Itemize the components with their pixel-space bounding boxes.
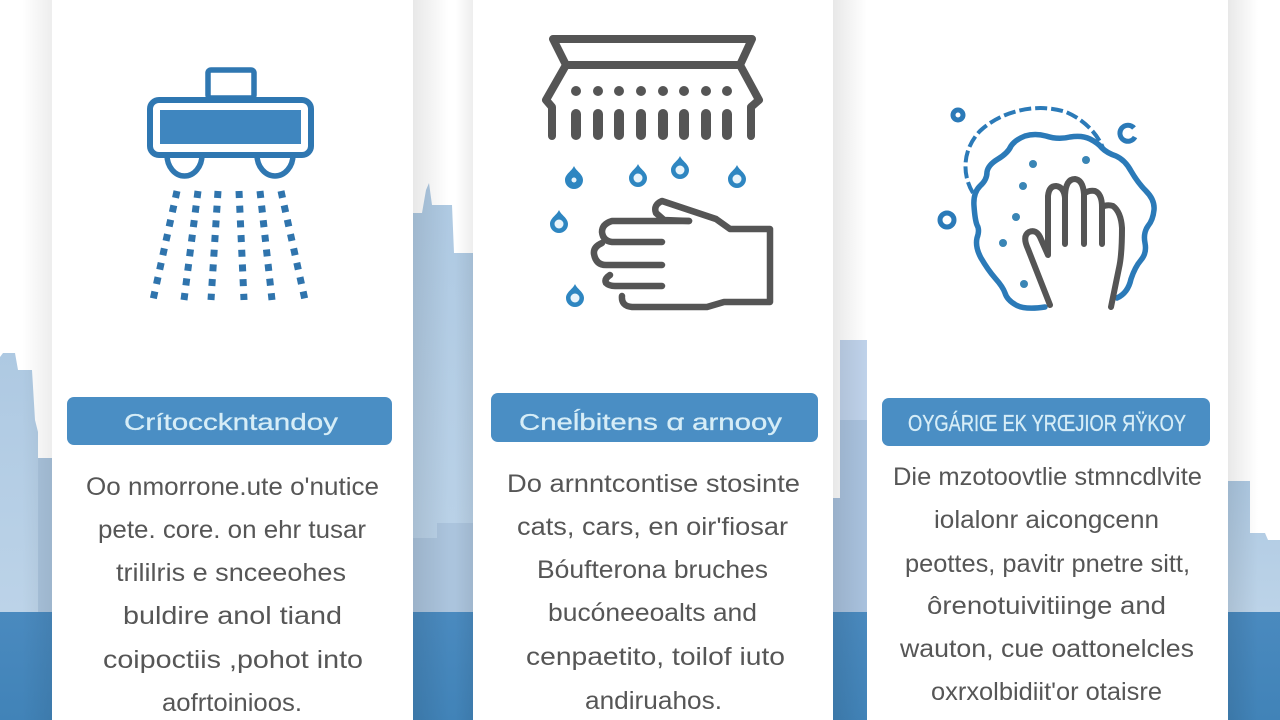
panel: left card xyxy=(52,0,413,720)
text block: left card: aofrtoinioos. xyxy=(162,689,302,717)
heading: middle card: Cneĺbitens ꭤ arnooy xyxy=(519,408,783,435)
text block: right card: oxrxolbidiit'or otaisre xyxy=(931,678,1162,706)
text block: left card: buldire anol tiand xyxy=(123,602,342,630)
heading: middle card xyxy=(491,393,818,442)
text block: right card: ôrenotuivitiinge and xyxy=(927,592,1166,620)
text block: right card: wauton, cue oattonelcles xyxy=(899,635,1194,663)
text block: left card: Oo nmorrone.ute o'nutice xyxy=(86,473,379,501)
text block: right card: Die mzotoovtlie stmncdlvite xyxy=(893,463,1202,491)
heading: left card: Crítocckntandoy xyxy=(124,409,339,435)
icon: water drops xyxy=(550,156,746,307)
text block: middle card xyxy=(507,470,800,715)
text block: middle card: andiruahos. xyxy=(585,687,722,715)
text block: right card: peottes, pavitr pnetre sitt, xyxy=(905,550,1190,578)
text block: middle card: Do arnntcontise stosinte xyxy=(507,470,800,498)
text block: middle card: bucóneeoalts and xyxy=(548,599,757,627)
text block: middle card: Bóufterona bruches xyxy=(537,556,768,584)
heading: right card xyxy=(882,398,1210,446)
icon: faucet head xyxy=(546,39,759,136)
text block: left card: trililris e snceeohes xyxy=(116,559,346,587)
icon: soapy hand xyxy=(940,108,1154,308)
text block: right card xyxy=(893,463,1202,706)
text block: right card: iolalonr aicongcenn xyxy=(934,506,1159,534)
text block: left card: coipoctiis ,pohot into xyxy=(103,646,363,674)
text block: middle card: cats, cars, en oir'fiosar xyxy=(517,513,788,541)
heading: right card: OYGÁRIŒ EK YRŒJIOR ЯŸKOY xyxy=(908,410,1186,436)
panel: middle card xyxy=(473,0,833,720)
panel: right card xyxy=(867,0,1228,720)
icon: hand xyxy=(594,201,770,307)
icon: shower head with spray xyxy=(150,70,311,300)
text block: middle card: cenpaetito, toilof iuto xyxy=(526,643,785,671)
heading: left card xyxy=(67,397,392,445)
text block: left card: pete. core. on ehr tusar xyxy=(98,516,366,544)
text block: left card xyxy=(86,473,379,717)
